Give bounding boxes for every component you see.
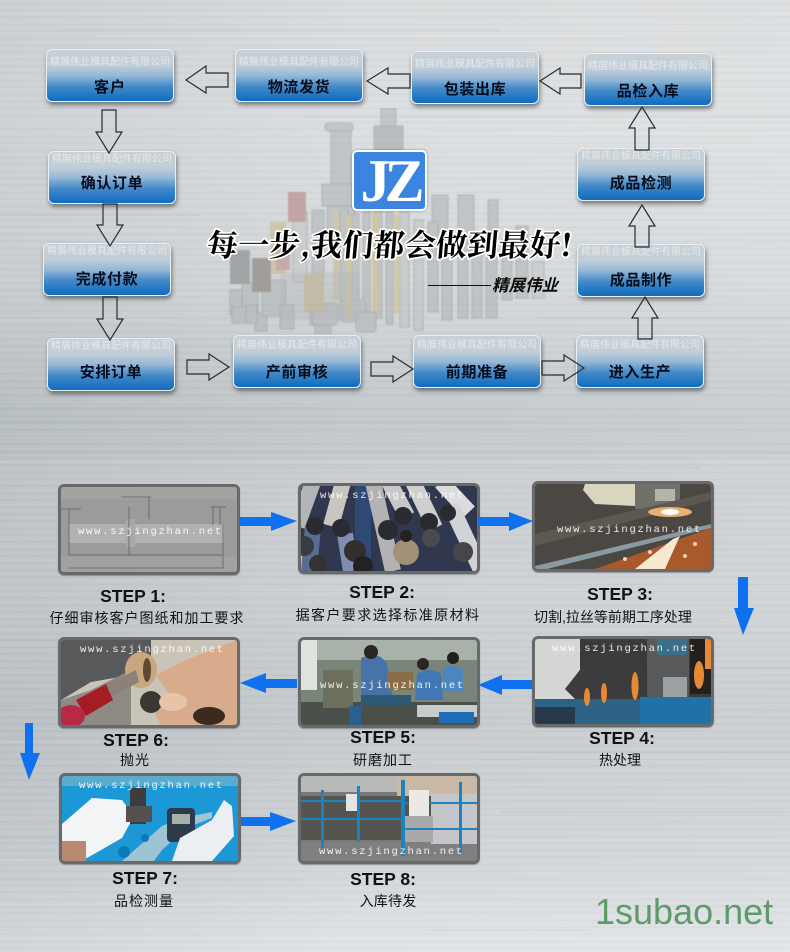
flow node: 客户: 客户 <box>94 79 126 96</box>
watermark: 1subao.net: 1subao.net <box>595 891 773 932</box>
arrow: step 4 to 5 <box>478 675 532 695</box>
step 7 description: 品检测量 <box>114 893 174 909</box>
step 3 heading: STEP 3: <box>587 584 653 604</box>
step 3 description: 切割,拉丝等前期工序处理 <box>534 609 692 625</box>
flow node: 包装出库 <box>411 51 539 104</box>
flow node: 进入生产: 进入生产 <box>609 364 671 381</box>
arrow: down to 完成付款 <box>97 204 123 246</box>
signature: 精展伟业: 精展伟业 <box>492 277 558 295</box>
photo: step 6 polishing by hand: www.szjingzhan.net <box>80 644 225 656</box>
arrow: step 2 to 3 <box>478 512 533 531</box>
flow node: 前期准备: 前期准备 <box>446 364 508 381</box>
flow node: 前期准备: 精展伟业模具配件有限公司 <box>417 340 537 351</box>
photo: step 5 grinding workshop <box>298 637 480 728</box>
arrow: step 7 to 8 <box>241 812 296 831</box>
slogan headline: 每一步,我们都会做到最好! <box>205 220 574 265</box>
flow node: 安排订单: 安排订单 <box>80 364 142 381</box>
flow node: 进入生产 <box>576 335 704 388</box>
flow node: 成品制作: 成品制作 <box>610 272 672 289</box>
flow node: 完成付款: 完成付款 <box>76 271 138 288</box>
arrow: up to 品检入库 <box>629 107 655 150</box>
photo: step 4 heat treatment furnace: www.szjingzhan.net <box>552 643 697 655</box>
flow node: 产前审核: 精展伟业模具配件有限公司 <box>237 340 357 351</box>
flow node: 前期准备 <box>413 335 541 388</box>
step 8 heading: STEP 8: <box>350 869 416 889</box>
photo: step 2 steel bars: www.szjingzhan.net <box>320 490 465 502</box>
step 5 description: 研磨加工 <box>353 752 413 768</box>
step 1 description: 仔细审核客户图纸和加工要求 <box>50 610 244 626</box>
photo: step 8 warehouse shelves: www.szjingzhan.net <box>319 846 464 858</box>
arrow: right to 进入生产 <box>542 355 584 381</box>
flow node: 确认订单: 确认订单 <box>81 175 143 192</box>
flow node: 确认订单: 精展伟业模具配件有限公司 <box>52 154 172 165</box>
step 4 heading: STEP 4: <box>589 728 655 748</box>
flow node: 安排订单 <box>47 338 175 391</box>
step 8 description: 入库待发 <box>360 893 416 909</box>
flow node: 成品检测: 成品检测 <box>610 175 672 192</box>
flow node: 包装出库: 精展伟业模具配件有限公司 <box>415 59 535 70</box>
step 6 description: 抛光 <box>120 752 150 768</box>
hollow flow arrows <box>95 65 659 383</box>
photo: step 2 steel bars <box>298 483 480 574</box>
arrow: step 3 to 4 <box>734 577 754 635</box>
photo: step 7 micrometer measuring: www.szjingzhan.net <box>79 780 224 792</box>
arrow: left to 物流发货 <box>367 68 410 94</box>
arrow: step 1 to 2 <box>240 512 297 531</box>
photo: step 8 warehouse shelves <box>298 773 480 864</box>
flow node: 物流发货 <box>235 49 363 102</box>
arrow: step 6 to 7 <box>20 723 40 780</box>
flow node: 确认订单 <box>48 151 176 204</box>
photo: step 5 grinding workshop: www.szjingzhan.net <box>320 680 465 692</box>
flow node: 产前审核: 产前审核 <box>266 364 328 381</box>
arrow: up to 成品检测 <box>629 205 655 247</box>
flow node: 包装出库: 包装出库 <box>444 81 506 98</box>
step 2 description: 据客户要求选择标准原材料 <box>296 607 480 623</box>
flow node: 成品制作 <box>577 244 705 297</box>
arrow: left to 客户 <box>186 66 228 93</box>
flow node: 品检入库: 精展伟业模具配件有限公司 <box>588 61 708 72</box>
flow node: 客户: 精展伟业模具配件有限公司 <box>50 57 170 68</box>
photo: step 6 polishing by hand <box>58 637 240 728</box>
flow node: 安排订单: 精展伟业模具配件有限公司 <box>51 341 171 352</box>
central product image: mould parts <box>229 108 545 334</box>
photo: step 3 cutting sparks: www.szjingzhan.net <box>557 524 702 536</box>
step 4 description: 热处理 <box>599 752 641 768</box>
flow node: 成品制作: 精展伟业模具配件有限公司 <box>581 247 701 258</box>
flow node: 成品检测 <box>577 148 705 201</box>
flow node: 完成付款: 精展伟业模具配件有限公司 <box>47 246 167 257</box>
photo: step 7 micrometer measuring <box>59 773 241 864</box>
step 1 heading: STEP 1: <box>100 586 166 606</box>
arrow: left to 包装出库 <box>540 68 581 94</box>
step 7 heading: STEP 7: <box>112 868 178 888</box>
flow node: 产前审核 <box>233 335 361 388</box>
arrow: up to 成品制作 <box>632 297 658 339</box>
arrow: right to 产前审核 <box>187 354 229 380</box>
flow node: 品检入库 <box>584 53 712 106</box>
step 5 heading: STEP 5: <box>350 727 416 747</box>
flow node: 客户 <box>46 49 174 102</box>
flow node: 物流发货: 物流发货 <box>268 79 330 96</box>
step 2 heading: STEP 2: <box>349 582 415 602</box>
photo: step 4 heat treatment furnace <box>532 636 714 727</box>
flow node: 成品检测: 精展伟业模具配件有限公司 <box>581 151 701 162</box>
arrow: down to 安排订单 <box>97 297 123 340</box>
photo: step 1 blueprint <box>58 484 240 575</box>
photo: step 3 cutting sparks <box>532 481 714 572</box>
photo: step 1 blueprint: www.szjingzhan.net <box>78 526 223 538</box>
arrow: right to 前期准备 <box>371 356 413 382</box>
flow node: 进入生产: 精展伟业模具配件有限公司 <box>580 340 700 351</box>
flow node: 物流发货: 精展伟业模具配件有限公司 <box>239 57 359 68</box>
blue process arrows <box>20 512 754 831</box>
arrow: down to 确认订单 <box>96 110 122 153</box>
flow node: 完成付款 <box>43 243 171 296</box>
arrow: step 5 to 6 <box>240 673 297 693</box>
flow node: 品检入库: 品检入库 <box>617 83 679 100</box>
step 6 heading: STEP 6: <box>103 730 169 750</box>
